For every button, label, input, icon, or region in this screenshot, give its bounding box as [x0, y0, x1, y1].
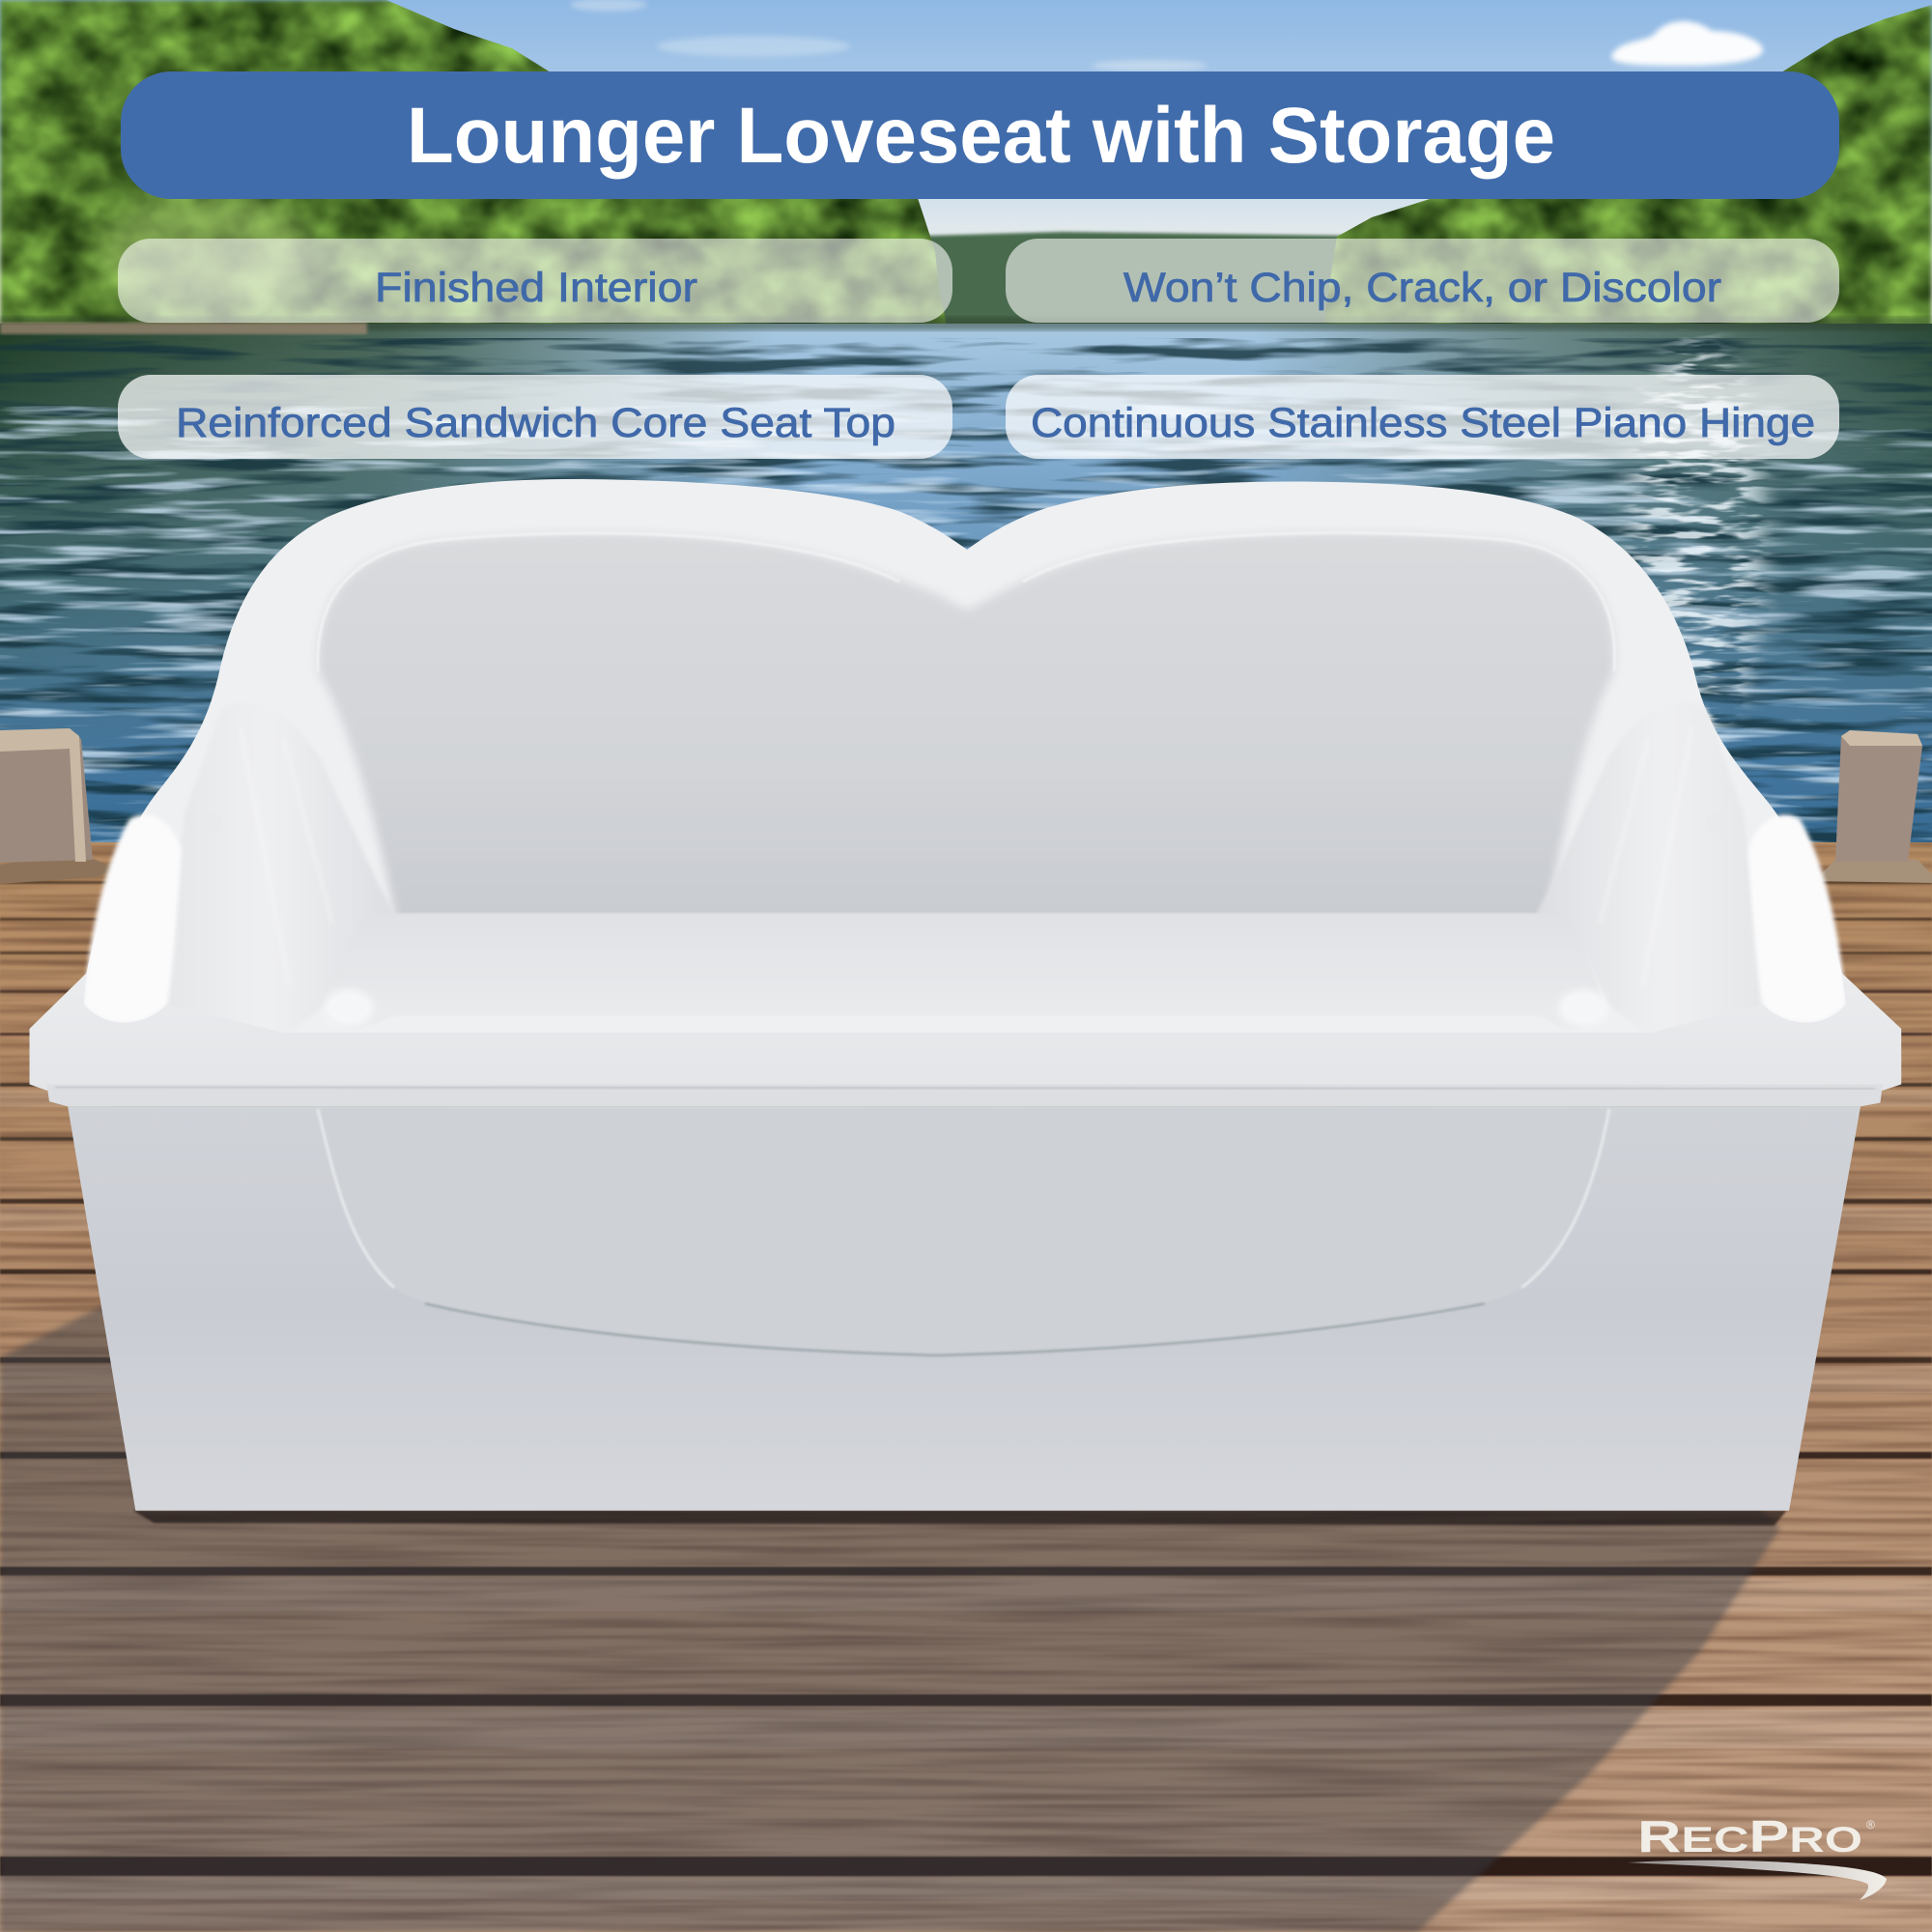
title bar: Lounger Loveseat with Storage: [407, 92, 1555, 180]
feature pill: piano hinge: [1006, 375, 1839, 459]
title bar: [121, 71, 1839, 199]
left trees: [0, 0, 947, 328]
right arm rest: [1534, 702, 1846, 1033]
RecPro logo: [1628, 1811, 1887, 1900]
RecPro logo: ®: [1866, 1818, 1875, 1832]
clouds: [570, 0, 1763, 71]
feature pill: piano hinge: Continuous Stainless Steel Piano Hinge: [1031, 400, 1815, 446]
groove under lid: [46, 1084, 1883, 1106]
feature pill: finished interior: [118, 239, 952, 323]
right trees: [1323, 5, 1932, 333]
sofa cast shadow: [0, 1304, 1780, 1932]
feature pill: sandwich core: Reinforced Sandwich Core Seat Top: [176, 400, 895, 446]
mooring post left: [0, 728, 118, 884]
feature pill: won't chip: Won’t Chip, Crack, or Discolor: [1123, 265, 1721, 311]
mooring post right: [1814, 730, 1932, 883]
left arm rest: [84, 702, 397, 1033]
back panel: [318, 533, 1615, 924]
back panel outline highlights: [318, 533, 1615, 671]
loveseat: [30, 479, 1901, 1525]
lid band: [30, 974, 1901, 1091]
sky: [0, 0, 1932, 290]
feature pill: won't chip: [1006, 239, 1839, 323]
body silhouette and rim: [30, 479, 1901, 1084]
water: [0, 324, 1932, 865]
dock planks: [0, 842, 1932, 1932]
RecPro logo: R EC P RO: [1637, 1811, 1862, 1861]
feature pill: sandwich core: [118, 375, 952, 459]
distant treeline: [927, 232, 1352, 328]
seat top: [325, 913, 1605, 1029]
front recess panel: [318, 1109, 1609, 1355]
seat corner highlights: [324, 989, 1608, 1026]
far shore: [0, 317, 1932, 330]
left trees highlight: [101, 195, 314, 311]
contact shadow: [133, 1511, 1786, 1525]
feature pill: finished interior: Finished Interior: [375, 265, 697, 311]
background: lake scene: [0, 0, 1932, 865]
storage base: [68, 1106, 1861, 1511]
